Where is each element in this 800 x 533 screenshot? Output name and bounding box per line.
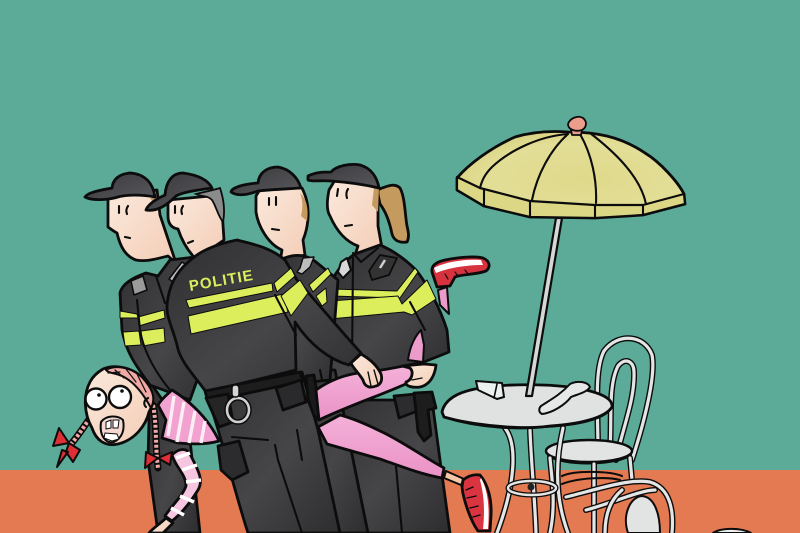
chair legs — [550, 458, 553, 533]
seat — [546, 440, 632, 462]
glass — [476, 381, 504, 399]
stripes — [120, 311, 138, 318]
torso — [120, 257, 215, 400]
left braid and bow — [71, 418, 90, 444]
neck and head — [327, 180, 382, 258]
legs — [290, 370, 368, 533]
torso — [270, 255, 338, 384]
mouth — [101, 416, 124, 442]
girl — [53, 367, 219, 533]
torso and sleeve — [321, 245, 449, 382]
girl's legs — [316, 366, 491, 531]
ponytail — [377, 185, 408, 242]
napkin / spoon — [539, 382, 590, 414]
cap — [146, 173, 212, 210]
canopy — [457, 132, 685, 218]
details: zipper, collar and badges — [352, 248, 425, 366]
cap — [308, 164, 379, 188]
white object at bottom edge — [713, 529, 751, 533]
pole — [526, 218, 562, 396]
striped arm — [165, 449, 200, 521]
lower shoe — [462, 475, 491, 531]
ankle — [444, 471, 464, 485]
parasol — [457, 117, 685, 396]
ear — [144, 398, 148, 407]
ribs — [480, 133, 646, 218]
legs — [205, 372, 340, 533]
rim — [457, 177, 685, 218]
cafe chair in background — [546, 338, 653, 533]
officer 4: woman with ponytail — [308, 164, 450, 533]
hand — [149, 518, 173, 533]
head — [108, 190, 176, 263]
belt — [205, 372, 303, 402]
head — [85, 367, 153, 445]
pouch — [218, 441, 248, 480]
legs — [325, 400, 450, 533]
legs — [148, 382, 200, 533]
toppled chair in foreground — [566, 481, 672, 533]
ground: orange pavement — [0, 470, 800, 533]
seam lines and badges — [137, 276, 170, 390]
stripes — [331, 268, 418, 298]
officer hands gripping the leg — [351, 354, 436, 387]
chair back — [597, 338, 653, 460]
jacket text: POLITIE — [188, 267, 255, 295]
cap — [231, 167, 301, 195]
eyes — [86, 388, 106, 410]
officer 3: man in the middle — [231, 167, 368, 533]
striped sweater torso — [158, 390, 219, 444]
upper leg — [316, 366, 414, 420]
reflective stripes — [186, 283, 273, 308]
finial — [571, 130, 582, 135]
officer 4 gear: holster — [394, 392, 436, 441]
officer 1: man at far left — [85, 173, 215, 533]
foot ring — [508, 481, 556, 495]
lower leg — [318, 415, 444, 478]
stripes and collar badge — [309, 268, 331, 292]
table legs — [497, 428, 513, 533]
table top — [442, 385, 612, 428]
hair — [106, 367, 153, 408]
head — [168, 195, 224, 262]
ear and hair — [372, 188, 379, 212]
right braid and bow — [153, 405, 158, 468]
handcuffs — [227, 385, 249, 422]
officer 2: front man with POLITIE on jacket — [146, 173, 361, 533]
pink leg behind officer arm — [408, 330, 424, 362]
upper shoe of the girl — [432, 257, 489, 314]
head — [256, 186, 308, 262]
cap — [85, 173, 155, 200]
chair ring — [562, 472, 622, 484]
sleeve seam — [275, 295, 296, 335]
torso and raised arm — [167, 240, 361, 392]
cafe table — [442, 381, 612, 533]
